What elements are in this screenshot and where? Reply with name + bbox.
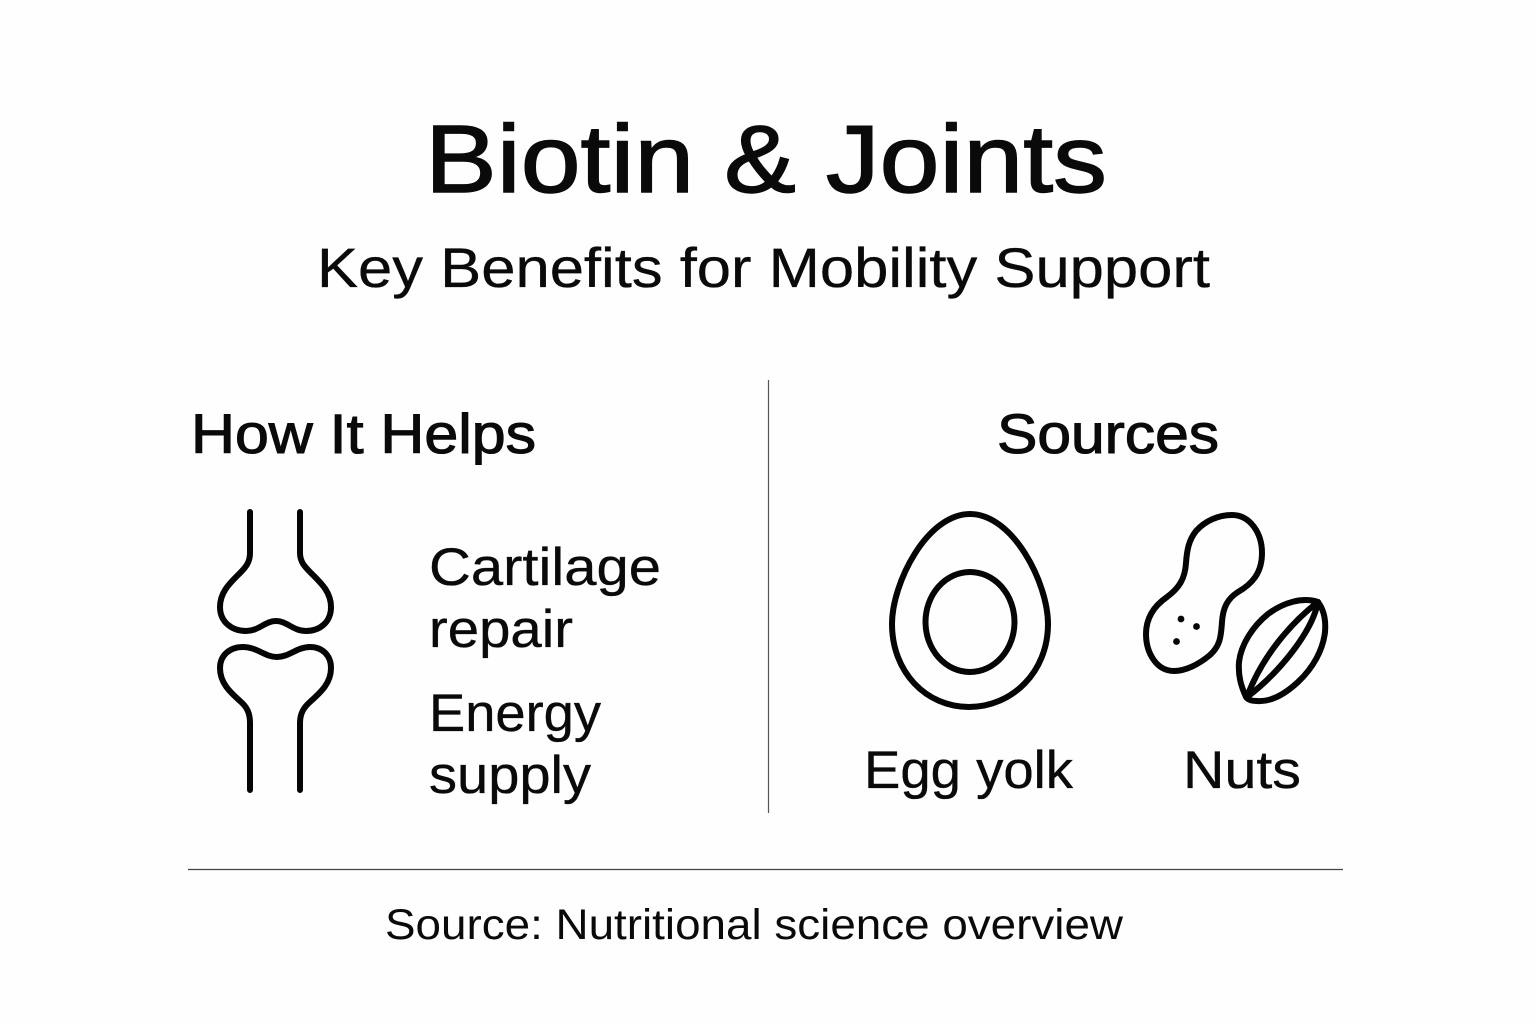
source note: Source: Nutritional science overview	[385, 901, 1124, 949]
benefit: energy supply: supply	[429, 746, 592, 805]
icon: peanut	[1146, 515, 1262, 671]
benefit: cartilage repair: Cartilage	[429, 538, 661, 597]
heading: sources: Sources	[997, 402, 1219, 465]
panel: how it helps	[191, 402, 661, 805]
label: nuts: Nuts	[1183, 741, 1301, 800]
benefit: cartilage repair: repair	[429, 600, 573, 659]
benefit: cartilage repair	[429, 538, 661, 659]
label: egg yolk: Egg yolk	[864, 741, 1074, 800]
benefit: energy supply	[429, 684, 602, 805]
subtitle: Key Benefits for Mobility Support	[317, 236, 1210, 299]
icon: almond	[1239, 600, 1325, 701]
title: Biotin & Joints	[425, 106, 1107, 213]
icon: egg	[892, 514, 1048, 707]
heading: how it helps: How It Helps	[191, 402, 536, 465]
icon: nuts	[1146, 515, 1325, 701]
panel: sources	[864, 402, 1325, 800]
icon: knee joint	[220, 512, 331, 790]
benefit: energy supply: Energy	[429, 684, 602, 743]
